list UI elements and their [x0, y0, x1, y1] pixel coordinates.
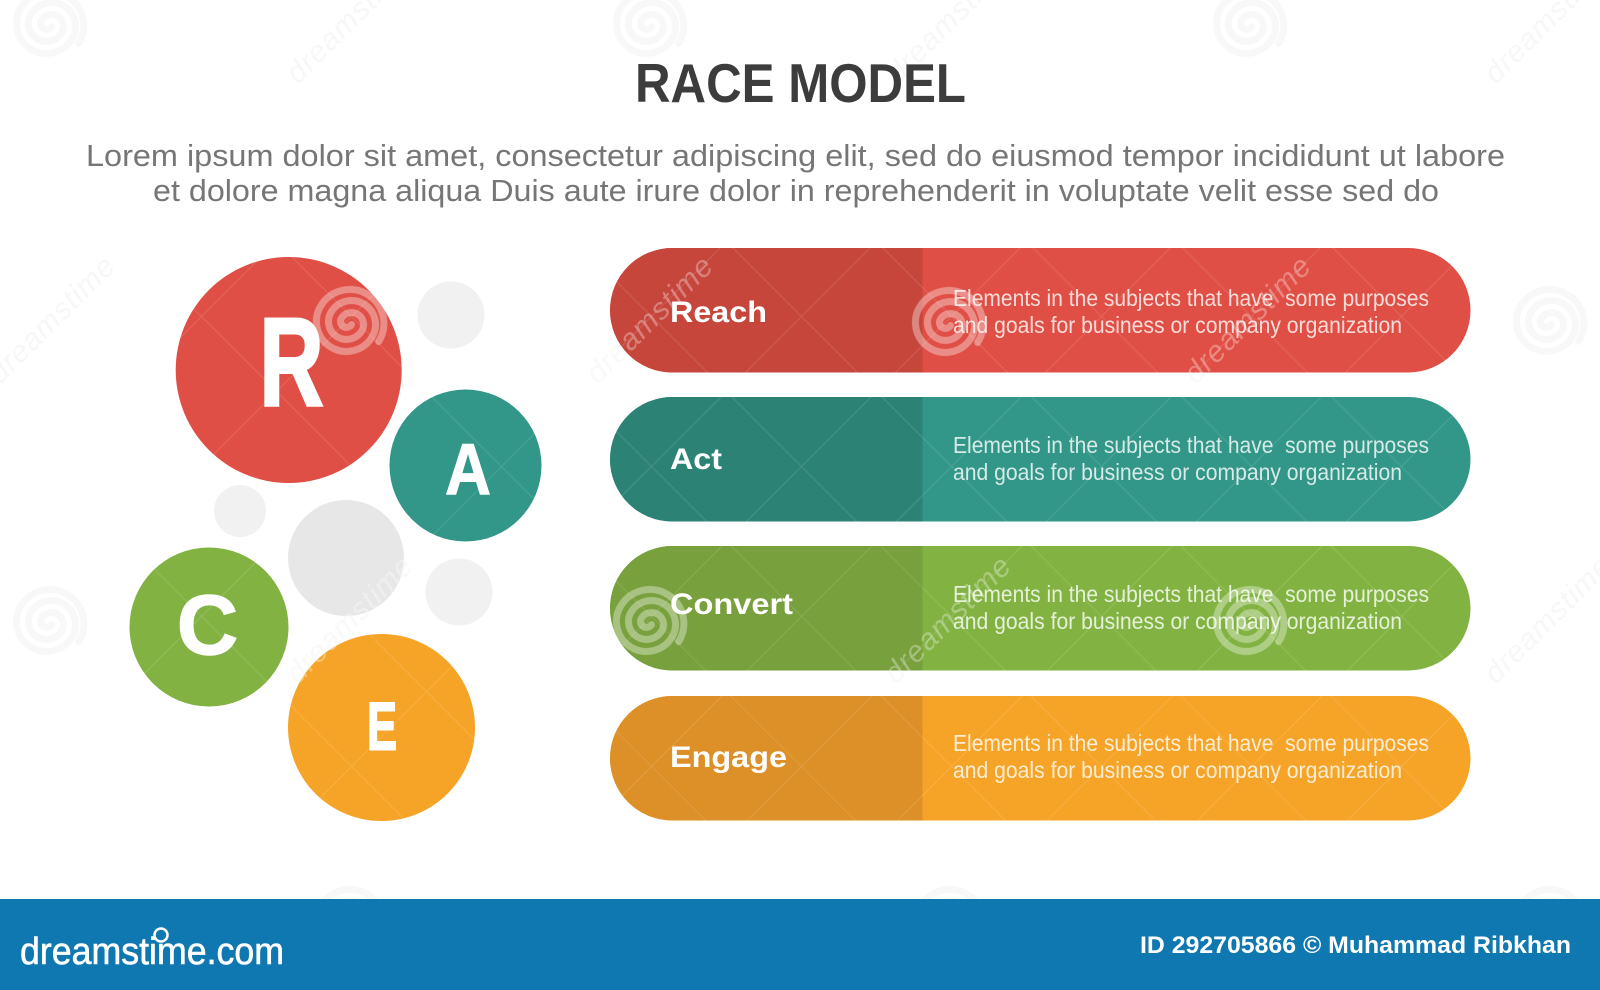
- description: Act: [953, 432, 1429, 485]
- circle C: [130, 548, 288, 706]
- footer credit: ID 292705866 © Muhammad Ribkhan: [1140, 932, 1571, 959]
- circle E: [288, 634, 475, 821]
- circle E: E: [367, 688, 397, 764]
- label: Reach: Reach: [670, 296, 767, 329]
- faint watermark text on background: dreamstime: [580, 250, 720, 390]
- faint watermark text on background: dreamstime: [280, 550, 420, 690]
- footer logo swirl: [154, 928, 168, 942]
- watermark swirls over artwork: [305, 277, 1297, 667]
- circle cluster: [130, 257, 542, 821]
- watermark text over artwork: [280, 250, 1318, 690]
- description: Reach: [953, 285, 1429, 338]
- grey decorative bubble left: [214, 485, 266, 537]
- description: Reach: Elements in the subjects that have some purposes: [953, 285, 1429, 311]
- description: Engage: [953, 730, 1429, 783]
- circle A: [390, 390, 542, 542]
- footer logo: dreamstime.com: [20, 931, 284, 973]
- grey decorative bubble large: [288, 500, 404, 616]
- description: Act: Elements in the subjects that have some purposes: [953, 432, 1429, 458]
- watermark text over artwork: dreamstime: [878, 550, 1018, 690]
- faint watermark text on background: dreamstime: [878, 550, 1018, 690]
- description: Engage: and goals for business or company organization: [953, 757, 1402, 783]
- watermark text over artwork: dreamstime: [280, 550, 420, 690]
- faint watermark text on background: [0, 0, 1600, 690]
- circle R: [176, 257, 402, 483]
- watermark text over artwork: dreamstime: [580, 250, 720, 390]
- pill: Engage: [610, 696, 1470, 820]
- watermark diagonal lattice: [130, 248, 1470, 821]
- description: Convert: and goals for business or company organization: [953, 608, 1402, 634]
- description: Convert: Elements in the subjects that have some purposes: [953, 581, 1429, 607]
- description: Engage: Elements in the subjects that have some purposes: [953, 730, 1429, 756]
- title: RACE MODEL: [635, 52, 966, 114]
- subtitle text: [86, 138, 1505, 208]
- label: Act: Act: [670, 443, 722, 476]
- description: Reach: and goals for business or company organization: [953, 312, 1402, 338]
- description: Act: and goals for business or company organization: [953, 459, 1402, 485]
- subtitle text: Lorem ipsum dolor sit amet, consectetur adipiscing elit, sed do eiusmod tempor incididunt ut labore: [86, 138, 1505, 173]
- watermark text over artwork: dreamstime: [1178, 250, 1318, 390]
- circle C: C: [177, 578, 238, 672]
- circle A: A: [445, 430, 491, 510]
- faint watermark text on background: dreamstime: [1178, 250, 1318, 390]
- circle R: R: [260, 294, 324, 432]
- footer banner: [0, 899, 1600, 990]
- label: Convert: Convert: [670, 588, 793, 621]
- subtitle text: et dolore magna aliqua Duis aute irure dolor in reprehenderit in voluptate velit esse sed do: [153, 173, 1439, 208]
- pill: Reach: [610, 248, 1470, 372]
- description: Convert: [953, 581, 1429, 634]
- label: Engage: Engage: [670, 741, 787, 774]
- grey decorative bubble top right: [418, 282, 484, 348]
- pill: Act: [610, 397, 1470, 522]
- grey decorative bubble lower right: [426, 558, 492, 626]
- pill: Convert: [610, 546, 1470, 670]
